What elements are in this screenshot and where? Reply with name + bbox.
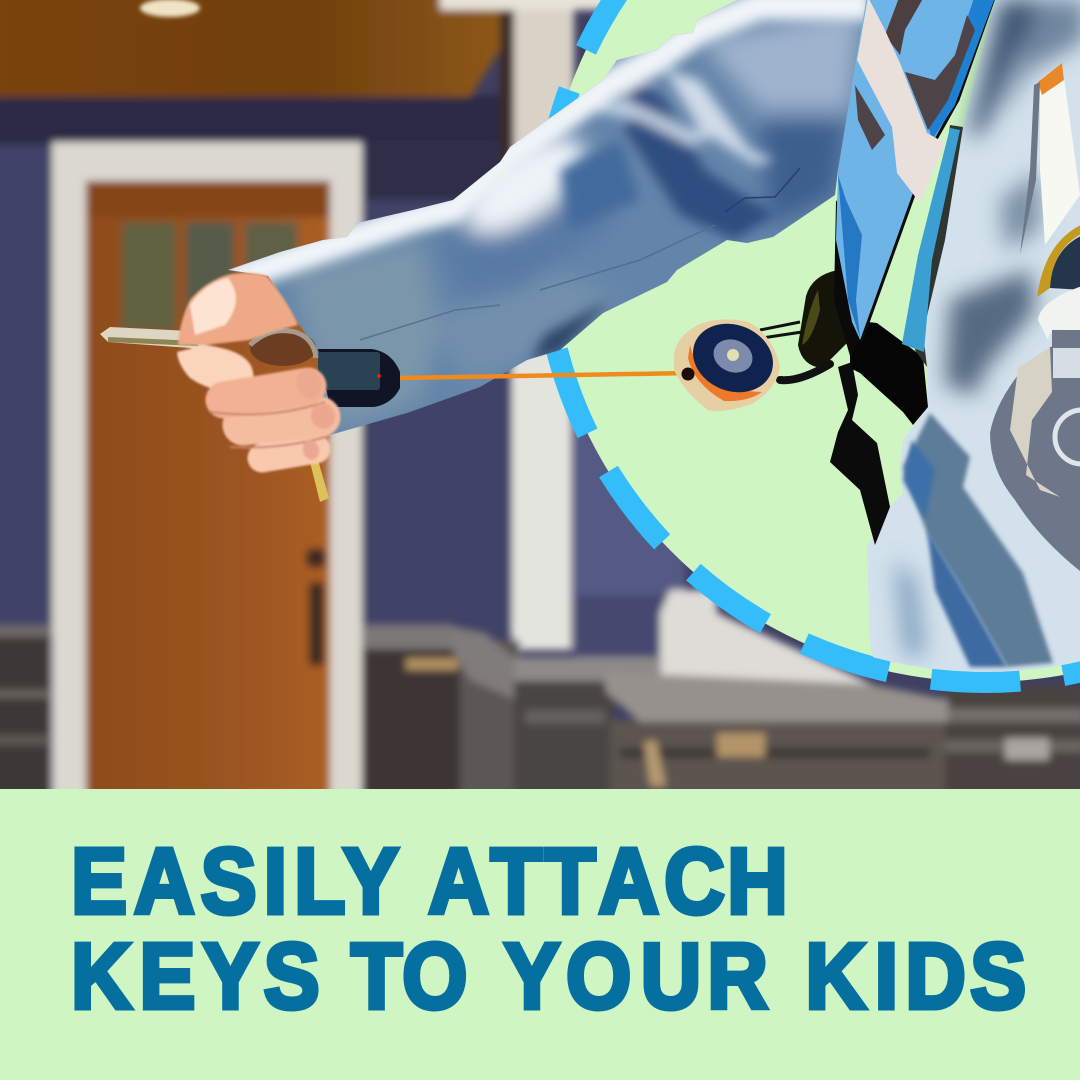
headline line 2: KEYS TO YOUR KIDS [71, 924, 1026, 1028]
thumb [177, 345, 254, 393]
brass key blade [310, 460, 329, 502]
door frame [52, 142, 362, 802]
keyring fob [318, 349, 400, 407]
right column [500, 0, 516, 160]
sleeve light and shadow [290, 10, 860, 430]
stone base [0, 625, 50, 800]
headline [71, 829, 1026, 1028]
strap pattern [885, 0, 925, 55]
sleeve seam [725, 168, 800, 212]
big shaded fold [903, 413, 1053, 667]
index finger [224, 386, 308, 400]
door window [122, 222, 176, 330]
ceiling light [140, 0, 200, 17]
sweatshirt shadows [895, 0, 1080, 655]
shoulder buckle [798, 270, 856, 368]
retractable badge reel [674, 312, 830, 411]
eyelet [682, 368, 694, 380]
fingernails [293, 366, 325, 402]
background: house entrance photo [0, 0, 1080, 802]
circular green badge with dashed ring [510, 0, 1080, 715]
blue fold stripe [927, 530, 1007, 667]
sleeve arm [220, 0, 880, 445]
shirt print: monster truck [990, 223, 1080, 575]
orange rim [688, 345, 762, 401]
strap edge [861, 0, 995, 342]
middle finger [243, 417, 320, 425]
blue backpack strap [836, 0, 997, 342]
finger crease [230, 436, 330, 448]
porch wall siding [42, 145, 516, 637]
dashed blue ring [510, 0, 1080, 715]
bright top rim [228, 5, 870, 280]
badge fill [543, 0, 1080, 682]
shirt print: letter [1020, 63, 1080, 255]
porch ceiling [0, 0, 520, 97]
keys [100, 327, 329, 502]
door lock [306, 548, 326, 568]
white plinth [660, 590, 878, 687]
black shoulder straps [798, 200, 928, 545]
headline line 1: EASILY ATTACH [71, 829, 788, 933]
reel case [674, 319, 780, 411]
bottom green banner [0, 789, 1080, 1080]
mesh strap [902, 128, 960, 352]
torso wearing sweatshirt [867, 0, 1080, 690]
dial [683, 312, 783, 404]
dark gap beside mesh [915, 125, 963, 367]
finger crease [210, 402, 325, 414]
diagonal strap [850, 320, 928, 425]
hand [177, 273, 338, 462]
dark sleeve folds [625, 75, 775, 240]
door [86, 181, 330, 801]
stone step ledge [604, 672, 948, 722]
clip loops [760, 322, 802, 338]
reflective ribbon [857, 0, 945, 203]
light fold tongues [665, 70, 775, 165]
ring finger [262, 449, 316, 458]
orange retractable cord [398, 373, 690, 378]
lower hanging strap [830, 362, 890, 545]
silver key blade [100, 327, 240, 362]
back of hand [178, 273, 298, 345]
key ring [250, 330, 316, 366]
